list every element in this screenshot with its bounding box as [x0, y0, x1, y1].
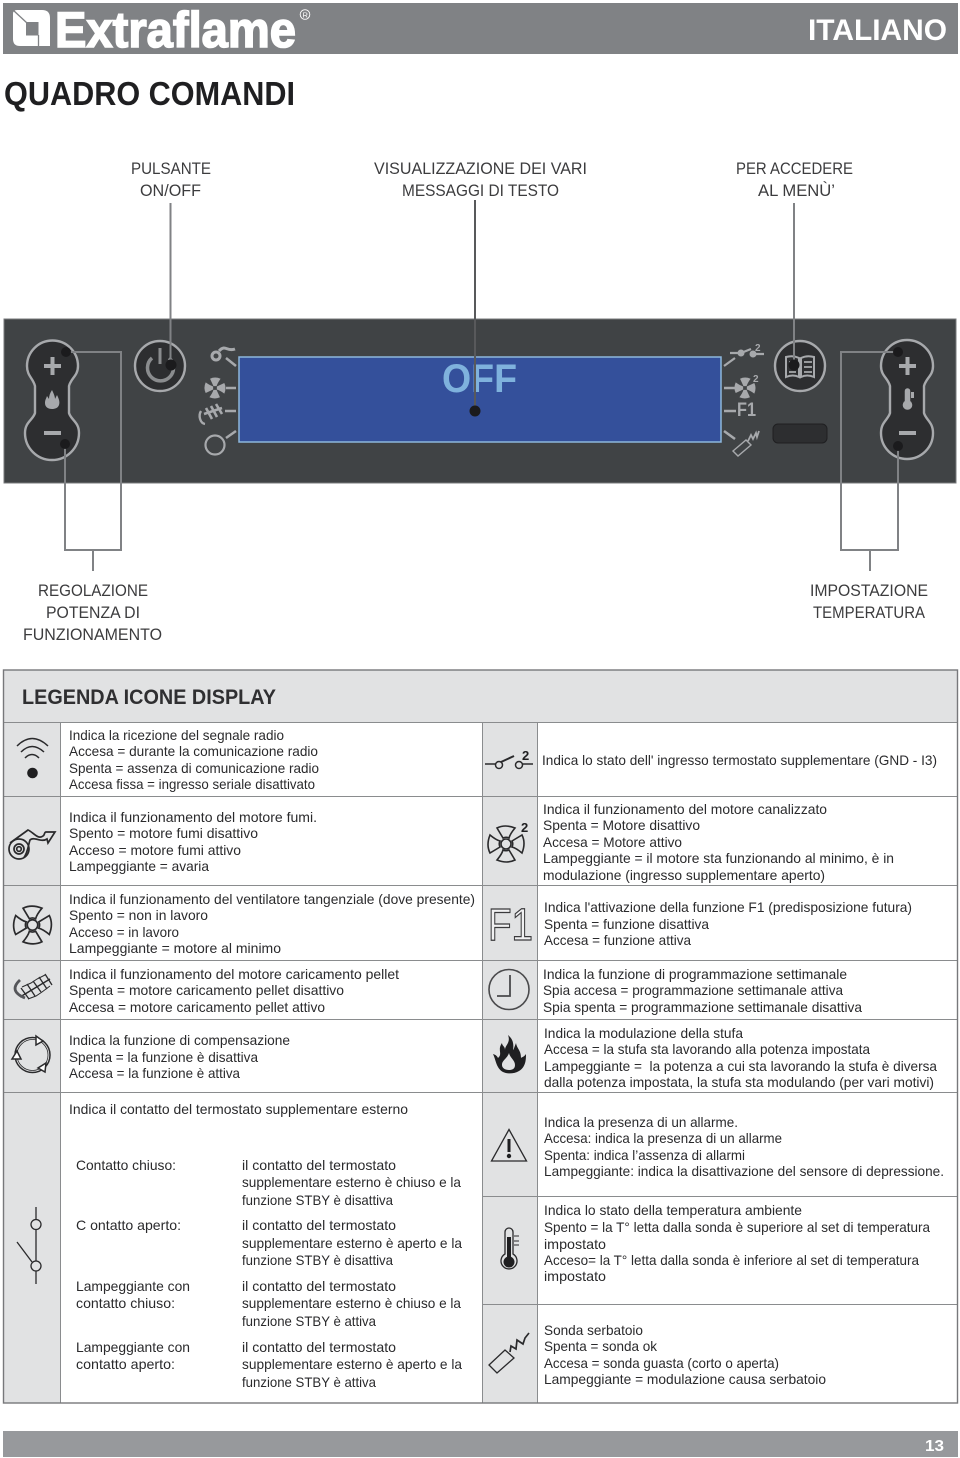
text: room temperature: Acceso= la T° letta dalla sonda è inferiore al set di temperatura	[544, 1253, 919, 1268]
text: external thermostat: Lampeggiante con	[76, 1340, 190, 1355]
text: pellet motor: Accesa = motore caricamento pellet attivo	[69, 1000, 325, 1015]
icon: tangential fan	[14, 906, 51, 944]
registered mark: R	[302, 10, 308, 20]
text: radio signal: Indica la ricezione del segnale radio	[69, 728, 284, 743]
icons: right display indicators	[724, 349, 764, 456]
label: visualizzazione messaggi: MESSAGGI DI TESTO	[402, 181, 559, 200]
label: impostazione temperatura	[810, 581, 928, 622]
label: regolazione potenza: REGOLAZIONE	[38, 581, 148, 600]
panel: control panel	[4, 319, 956, 483]
text: room temperature	[544, 1203, 930, 1284]
text: ducted motor: Indica il funzionamento del motore canalizzato	[543, 802, 827, 817]
icon: Extraflame logo mark	[13, 10, 50, 46]
text: compensation: Accesa = la funzione è attiva	[69, 1066, 240, 1081]
icon: external thermostat contact	[17, 1207, 41, 1284]
text: smoke motor: Indica il funzionamento del motore fumi.	[69, 810, 317, 825]
text: F1 function: Indica l'attivazione della funzione F1 (predisposizione futura)	[544, 900, 912, 915]
label: visualizzazione messaggi: VISUALIZZAZIONE DEI VARI	[374, 159, 587, 178]
text: room temperature: Spento = la T° letta dalla sonda è superiore al set di temperatura	[544, 1220, 930, 1235]
text: smoke motor: Acceso = motore fumi attivo	[69, 843, 241, 858]
icons: left display indicators	[200, 348, 236, 454]
label: regolazione potenza	[23, 581, 162, 644]
legend heading: LEGENDA ICONE DISPLAY	[22, 686, 276, 709]
icon: tank probe	[489, 1333, 529, 1373]
text: external thermostat: funzione STBY è disattiva	[242, 1193, 393, 1208]
button: power on/off	[135, 341, 185, 391]
label: regolazione potenza: FUNZIONAMENTO	[23, 625, 162, 644]
text: room temperature: Indica lo stato della temperatura ambiente	[544, 1203, 802, 1218]
text: smoke motor: Lampeggiante = avaria	[69, 859, 209, 874]
label: impostazione temperatura: IMPOSTAZIONE	[810, 581, 928, 600]
text: weekly programming: Spia accesa = programmazione settimanale attiva	[543, 983, 843, 998]
button: temperature regulation	[881, 340, 933, 459]
icon: thermometer	[501, 1228, 519, 1269]
text: alarm: Indica la presenza di un allarme.	[544, 1115, 738, 1130]
text: compensation: Spenta = la funzione è disattiva	[69, 1050, 258, 1065]
callout dots	[60, 347, 903, 451]
label: visualizzazione messaggi	[374, 159, 587, 200]
text: external thermostat: funzione STBY è attiva	[242, 1375, 376, 1390]
icon: flame	[493, 1035, 526, 1073]
label: accesso al menu	[736, 159, 853, 200]
text: supplementary thermostat: Indica lo stato dell' ingresso termostato supplementare (GND - I3)	[542, 753, 937, 768]
text: external thermostat	[69, 1102, 462, 1390]
registered mark	[300, 10, 310, 20]
text: external thermostat: supplementare esterno è chiuso e la	[242, 1175, 461, 1190]
text: stove modulation	[544, 1026, 937, 1090]
text: tangential fan: Indica il funzionamento del ventilatore tangenziale (dove presente)	[69, 892, 475, 907]
text: F1 function	[544, 900, 912, 948]
icon: supplementary thermostat	[485, 748, 533, 768]
text: tangential fan: Lampeggiante = motore al minimo	[69, 941, 281, 956]
language label: ITALIANO	[808, 14, 947, 47]
icon: F1: F1	[488, 899, 533, 950]
text: tank probe: Accesa = sonda guasta (corto o aperta)	[544, 1356, 779, 1371]
text: tangential fan: Acceso = in lavoro	[69, 925, 179, 940]
text: external thermostat: il contatto del termostato	[242, 1158, 396, 1173]
text: ducted motor: Spenta = Motore disattivo	[543, 818, 700, 833]
label: pulsante on/off: ON/OFF	[140, 181, 201, 200]
text: smoke motor: Spento = motore fumi disattivo	[69, 826, 258, 841]
text: external thermostat: C ontatto aperto:	[76, 1218, 181, 1233]
logo wordmark: Extraflame	[55, 2, 296, 58]
label: regolazione potenza: POTENZA DI	[46, 603, 140, 622]
icon: compensation arrows	[12, 1036, 50, 1072]
text: external thermostat: il contatto del termostato	[242, 1279, 396, 1294]
indicator texts: 2	[753, 374, 759, 385]
text: radio signal: Accesa = durante la comunicazione radio	[69, 744, 318, 759]
text: external thermostat: supplementare esterno è aperto e la	[242, 1236, 462, 1251]
icon: ducted fan: 2	[521, 820, 528, 835]
text: radio signal: Accesa fissa = ingresso seriale disattivato	[69, 777, 315, 792]
indicator texts: F1	[737, 400, 756, 421]
footer bar with page number	[3, 1431, 958, 1457]
text: F1 function: Accesa = funzione attiva	[544, 933, 691, 948]
text: pellet motor: Indica il funzionamento del motore caricamento pellet	[69, 967, 399, 982]
text: stove modulation: Indica la modulazione della stufa	[544, 1026, 743, 1041]
text: external thermostat: contatto aperto:	[76, 1357, 175, 1372]
display screen	[239, 357, 721, 442]
text: room temperature: impostato	[544, 1237, 606, 1252]
text: external thermostat: funzione STBY è attiva	[242, 1314, 376, 1329]
button: menu book	[775, 341, 825, 391]
text: tangential fan	[69, 892, 475, 956]
text: alarm: Spenta: indica l’assenza di allarmi	[544, 1148, 745, 1163]
text: compensation: Indica la funzione di compensazione	[69, 1033, 290, 1048]
label: accesso al menu: PER ACCEDERE	[736, 159, 853, 178]
text: weekly programming: Spia spenta = programmazione settimanale disattiva	[543, 1000, 862, 1015]
text: external thermostat: Lampeggiante con	[76, 1279, 190, 1294]
text: stove modulation: dalla potenza impostata, la stufa sta modulando (per vari motivi)	[544, 1075, 934, 1090]
footer bar with page number: 13	[925, 1438, 944, 1455]
display screen: OFF	[442, 357, 517, 401]
label: impostazione temperatura: TEMPERATURA	[813, 603, 926, 622]
text: stove modulation: Lampeggiante = la potenza a cui sta lavorando la stufa è diversa	[544, 1059, 937, 1074]
text: radio signal	[69, 728, 319, 792]
text: compensation	[69, 1033, 290, 1081]
text: stove modulation: Accesa = la stufa sta lavorando alla potenza impostata	[544, 1042, 870, 1057]
text: weekly programming	[543, 967, 862, 1015]
icon: ducted fan	[488, 820, 528, 862]
text: pellet motor	[69, 967, 399, 1015]
icon: supplementary thermostat: 2	[522, 748, 529, 763]
text: alarm: Accesa: indica la presenza di un allarme	[544, 1131, 782, 1146]
text: ducted motor: modulazione (ingresso supplementare aperto)	[543, 868, 825, 883]
text: ducted motor: Lampeggiante = il motore sta funzionando al minimo, è in	[543, 851, 894, 866]
icon: radio signal	[17, 738, 48, 778]
text: tank probe	[544, 1323, 826, 1387]
button: power regulation	[25, 340, 79, 460]
text: tank probe: Lampeggiante = modulazione causa serbatoio	[544, 1372, 826, 1387]
text: pellet motor: Spenta = motore caricamento pellet disattivo	[69, 983, 344, 998]
text: external thermostat: contatto chiuso:	[76, 1296, 175, 1311]
callout lines	[65, 200, 898, 571]
text: F1 function: Spenta = funzione disattiva	[544, 917, 709, 932]
text: external thermostat: supplementare esterno è chiuso e la	[242, 1296, 461, 1311]
text: external thermostat: Contatto chiuso:	[76, 1158, 176, 1173]
icon: clock	[489, 970, 529, 1010]
icon: pellet auger	[15, 974, 52, 999]
indicator texts	[737, 343, 761, 421]
text: external thermostat: il contatto del termostato	[242, 1218, 396, 1233]
text: alarm	[544, 1115, 944, 1179]
legend heading	[4, 670, 958, 722]
text: radio signal: Spenta = assenza di comunicazione radio	[69, 761, 319, 776]
text: external thermostat: Indica il contatto del termostato supplementare esterno	[69, 1102, 408, 1117]
text: ducted motor	[543, 802, 894, 883]
icon: alarm triangle	[492, 1130, 526, 1161]
text: external thermostat: il contatto del termostato	[242, 1340, 396, 1355]
black indicator window	[773, 424, 827, 443]
title: QUADRO COMANDI	[4, 75, 295, 112]
text: external thermostat: funzione STBY è disattiva	[242, 1253, 393, 1268]
text: external thermostat: supplementare esterno è aperto e la	[242, 1357, 462, 1372]
label: accesso al menu: AL MENÙ’	[758, 181, 835, 200]
text: room temperature: impostato	[544, 1269, 606, 1284]
panel: legend table	[3, 670, 958, 1403]
label: pulsante on/off: PULSANTE	[131, 159, 211, 178]
text: tank probe: Spenta = sonda ok	[544, 1339, 657, 1354]
text: weekly programming: Indica la funzione di programmazione settimanale	[543, 967, 847, 982]
text: tangential fan: Spento = non in lavoro	[69, 908, 208, 923]
text: ducted motor: Accesa = Motore attivo	[543, 835, 682, 850]
text: smoke motor	[69, 810, 317, 874]
icon: smoke motor	[9, 830, 55, 859]
text: alarm: Lampeggiante: indica la disattivazione del sensore di depressione.	[544, 1164, 944, 1179]
text: tank probe: Sonda serbatoio	[544, 1323, 643, 1338]
label: pulsante on/off	[131, 159, 211, 200]
header bar	[3, 2, 958, 58]
indicator texts: 2	[755, 343, 761, 354]
